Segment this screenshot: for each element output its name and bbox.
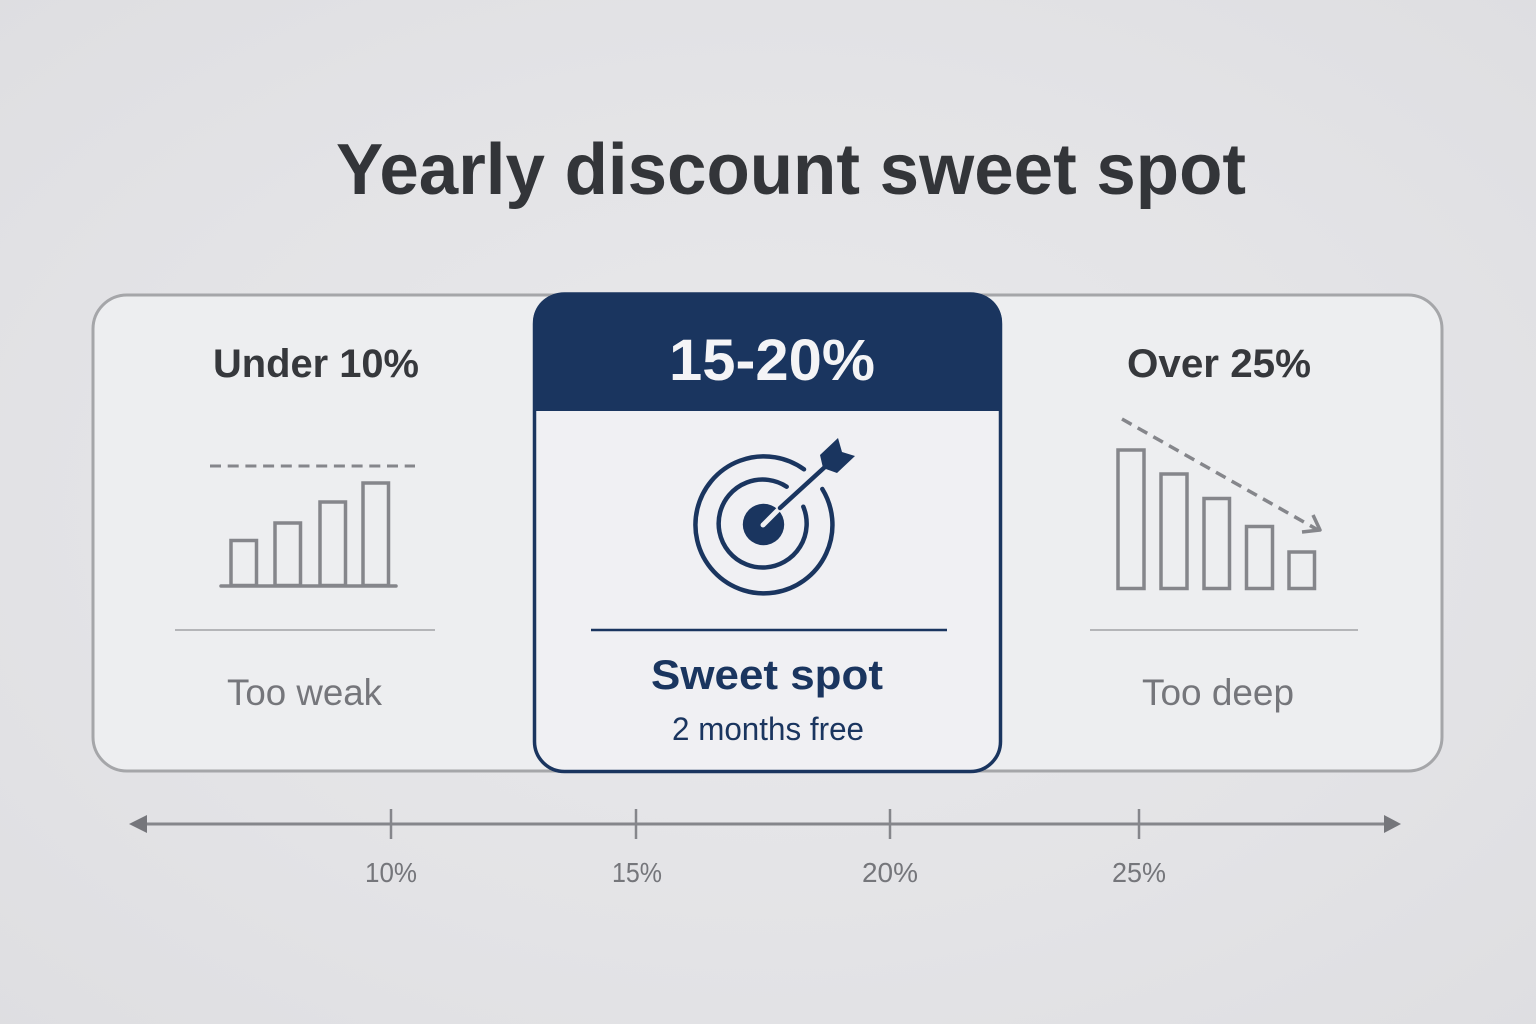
chart: small rising bars below dashed line [210,466,415,586]
tick label: 25%: 25% [1112,857,1166,888]
icon: target with arrow [695,438,855,593]
chart: falling bars with dashed arrow [1118,419,1320,588]
arrow: axis right [1384,815,1401,833]
label: too weak: Too weak [227,672,382,713]
tick label: 20%: 20% [862,857,918,888]
heading: under 10%: Under 10% [213,342,419,386]
header band [533,293,1002,411]
title: Yearly discount sweet spot [336,130,1246,210]
panel: too weak [175,342,435,713]
label: 2 months free: 2 months free [672,711,864,747]
axis: discount scale [129,809,1401,888]
arrow: axis left [129,815,147,833]
panel: sweet spot [533,293,1002,772]
panel: comparison card [93,295,1442,771]
panel: too deep [1090,342,1358,713]
heading: over 25%: Over 25% [1127,342,1311,386]
heading: 15-20%: 15-20% [669,328,875,393]
tick label: 10%: 10% [365,857,417,888]
label: too deep: Too deep [1142,672,1294,713]
tick label: 15%: 15% [612,857,662,888]
label: sweet spot: Sweet spot [651,651,883,698]
